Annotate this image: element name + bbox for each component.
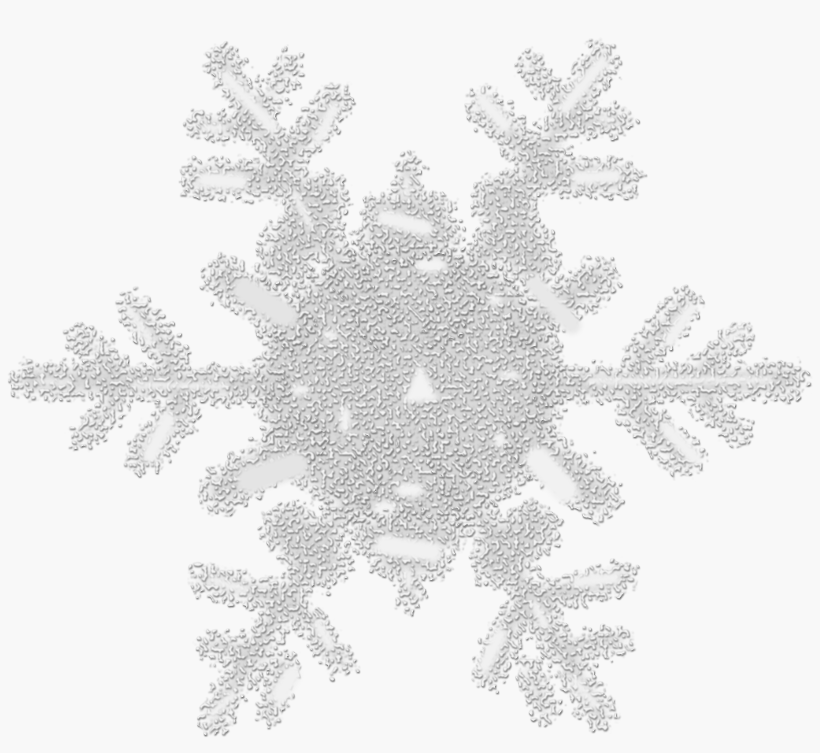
arm: lower left	[205, 450, 380, 715]
arm: lower right	[440, 450, 620, 715]
arm: left	[28, 310, 270, 455]
arm: bottom spike	[372, 520, 445, 598]
arm: right	[550, 305, 790, 458]
arm: upper right	[440, 60, 622, 330]
arm: top spike	[375, 170, 445, 250]
petal: lower left	[222, 440, 300, 490]
petal: upper left	[225, 278, 290, 325]
petal: upper right	[530, 280, 595, 325]
petal: lower right	[530, 440, 595, 495]
arm: upper left	[200, 60, 380, 330]
central disk	[255, 240, 565, 530]
